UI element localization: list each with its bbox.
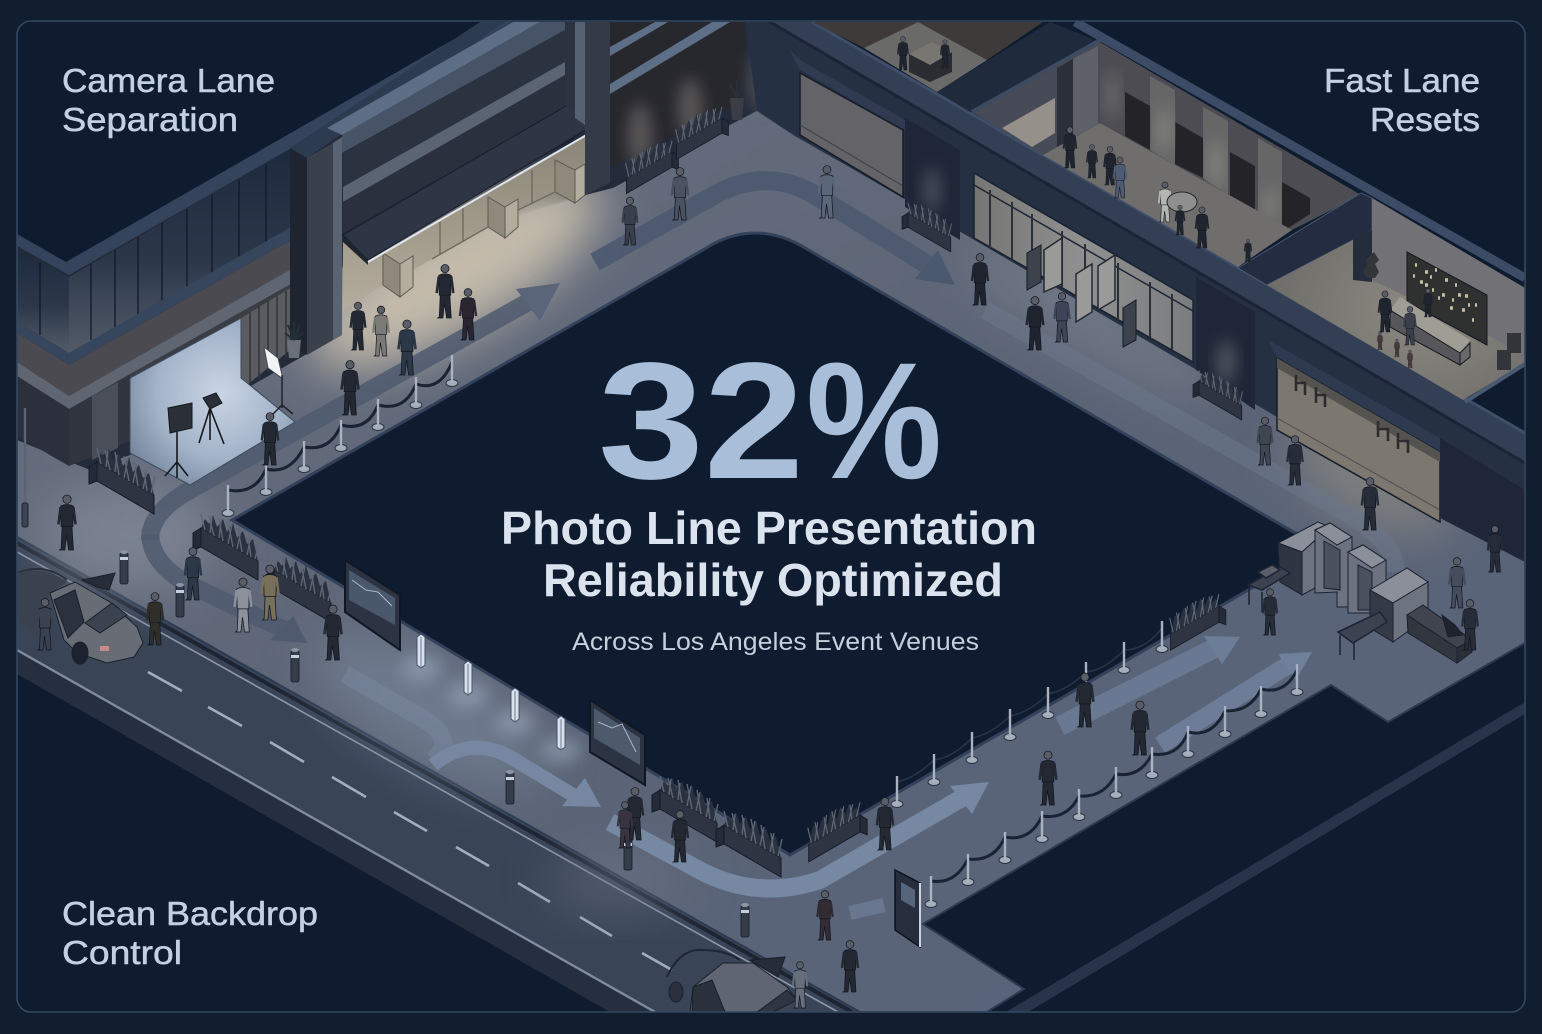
canopy bbox=[343, 105, 597, 265]
diagonal service strip bbox=[1006, 702, 1525, 1012]
stanchions: outer queue bbox=[925, 664, 1303, 908]
metal detector two bbox=[1348, 545, 1386, 613]
corner wall bbox=[610, 22, 768, 168]
lower wall bbox=[17, 374, 130, 466]
arrow: corner lane bbox=[610, 782, 989, 889]
key light softbox bbox=[264, 347, 293, 415]
planter: queue edge bbox=[1170, 594, 1226, 650]
planter: lower left one bbox=[652, 776, 718, 842]
label: camera lane separation: Camera Lane bbox=[62, 62, 275, 99]
arrow: toward security bbox=[985, 310, 1396, 572]
entrance doorway bbox=[790, 50, 905, 197]
planter: sidewalk one bbox=[193, 514, 259, 580]
reception room bbox=[1267, 198, 1525, 400]
planter: lower left two bbox=[716, 811, 782, 877]
people: security area bbox=[1263, 526, 1502, 650]
planters bbox=[89, 107, 1242, 877]
label: clean backdrop control: Clean Backdrop bbox=[62, 895, 318, 932]
people: street side bbox=[37, 495, 342, 660]
operator desk bbox=[1407, 605, 1472, 663]
small reception room bbox=[812, 22, 1043, 92]
label: clean backdrop control: Control bbox=[62, 934, 182, 971]
label: fast lane resets: Fast Lane bbox=[1324, 62, 1480, 99]
left wall bbox=[972, 42, 1100, 155]
label: fast lane resets: Resets bbox=[1370, 101, 1480, 138]
reception desk bbox=[1390, 297, 1470, 365]
street bollards bbox=[120, 550, 749, 937]
right building bbox=[745, 22, 1525, 562]
people and furniture: lobby and rooms bbox=[898, 37, 1432, 368]
arrow: lower queue lane bbox=[1160, 652, 1312, 745]
arrow: upper queue lane bbox=[1060, 636, 1240, 726]
security checkpoint bbox=[1248, 522, 1472, 663]
ledge bands bbox=[17, 222, 300, 409]
stat title: Reliability Optimized bbox=[543, 554, 1003, 606]
central dark plaza bbox=[232, 233, 1321, 855]
planter: corner right bbox=[676, 107, 728, 160]
metal detector one bbox=[1315, 523, 1352, 607]
scanner A bbox=[1278, 522, 1330, 595]
label: camera lane separation: Separation bbox=[62, 101, 238, 138]
conveyor table right bbox=[1338, 612, 1387, 660]
stanchions: camera lane bbox=[222, 355, 458, 516]
arrow: return lane bbox=[433, 748, 601, 807]
kiosk bbox=[895, 870, 920, 947]
door columns bbox=[383, 160, 575, 297]
headline stat: 3 bbox=[598, 329, 704, 514]
flow arrows bbox=[150, 181, 1396, 913]
lobby room bbox=[972, 22, 1525, 278]
car: bottom curb bbox=[667, 950, 797, 1012]
street lamp post bbox=[22, 408, 28, 527]
feature wall bbox=[1407, 252, 1487, 345]
softbox light on stand bbox=[165, 403, 192, 478]
pillar with uplight bbox=[1196, 277, 1255, 410]
glass curtain wall bbox=[18, 165, 290, 353]
potted plant bbox=[285, 322, 303, 358]
left building bbox=[17, 22, 812, 485]
door panels bbox=[1027, 245, 1136, 347]
back wall panels bbox=[1125, 92, 1310, 232]
people: sidewalk walkers bbox=[623, 166, 1378, 530]
people: photo line group bbox=[262, 265, 476, 465]
stat subtitle: Across Los Angeles Event Venues bbox=[572, 628, 979, 656]
arrow: kiosk lane bbox=[850, 905, 884, 913]
planter: corner left bbox=[626, 141, 678, 194]
planter: pillar one bbox=[902, 202, 952, 252]
screen two bbox=[590, 700, 645, 785]
label: fast lane resets bbox=[1324, 62, 1480, 138]
headline stat: 2 bbox=[704, 329, 804, 514]
arrow: branch to screen bbox=[150, 535, 307, 643]
dark pillar bbox=[905, 118, 960, 240]
lit doorway bay bbox=[343, 130, 595, 310]
roof edge bbox=[17, 22, 512, 275]
people: lower lane bbox=[618, 673, 1148, 1008]
planter: studio bbox=[89, 448, 155, 514]
roof band bbox=[770, 22, 1525, 463]
arrow: camera lane bbox=[150, 283, 560, 540]
arrow: around the corner bbox=[595, 181, 955, 285]
screen one bbox=[345, 560, 400, 650]
scanner B bbox=[1370, 568, 1428, 642]
potted plant and lounge bbox=[1363, 252, 1521, 370]
glass entrance facade bbox=[974, 173, 1193, 362]
pillar two bbox=[565, 22, 610, 195]
label: camera lane separation bbox=[62, 62, 275, 138]
potted plant at corner bbox=[730, 80, 744, 120]
car: left curb bbox=[17, 569, 143, 664]
stat title bbox=[501, 502, 1037, 606]
planter: sidewalk two bbox=[266, 556, 332, 622]
far pillar bbox=[1440, 438, 1525, 562]
stat title: Photo Line Presentation bbox=[501, 502, 1037, 554]
room rear wall bbox=[1372, 198, 1525, 358]
cross band bbox=[937, 22, 1095, 112]
lobby floor bbox=[1043, 123, 1292, 267]
label: clean backdrop control bbox=[62, 895, 318, 971]
arrow: faded lane bbox=[345, 674, 443, 760]
road bbox=[17, 537, 860, 1012]
planter: pillar two bbox=[1193, 370, 1242, 420]
cross band two bbox=[1238, 193, 1372, 285]
conveyor table left bbox=[1248, 565, 1290, 612]
service door pillar bbox=[1353, 230, 1372, 282]
planter: diamond corner bbox=[808, 802, 867, 862]
bollards bbox=[120, 550, 749, 937]
display niche bbox=[1002, 98, 1055, 147]
lower facade base bbox=[745, 22, 1525, 562]
lit bollards bbox=[401, 634, 581, 763]
pillar one bbox=[290, 22, 505, 355]
video camera on tripod bbox=[199, 393, 224, 444]
backdrop studio bbox=[130, 318, 303, 485]
stanchions: inner queue bbox=[891, 621, 1168, 808]
room floor edge bbox=[1465, 364, 1525, 402]
headline stat: % bbox=[806, 329, 942, 514]
upper facade strips bbox=[327, 22, 565, 202]
floor lighting bbox=[40, 139, 1468, 910]
grey curtain bbox=[130, 284, 290, 384]
digital screens bbox=[345, 560, 920, 947]
restaurant opening bbox=[1268, 340, 1440, 522]
